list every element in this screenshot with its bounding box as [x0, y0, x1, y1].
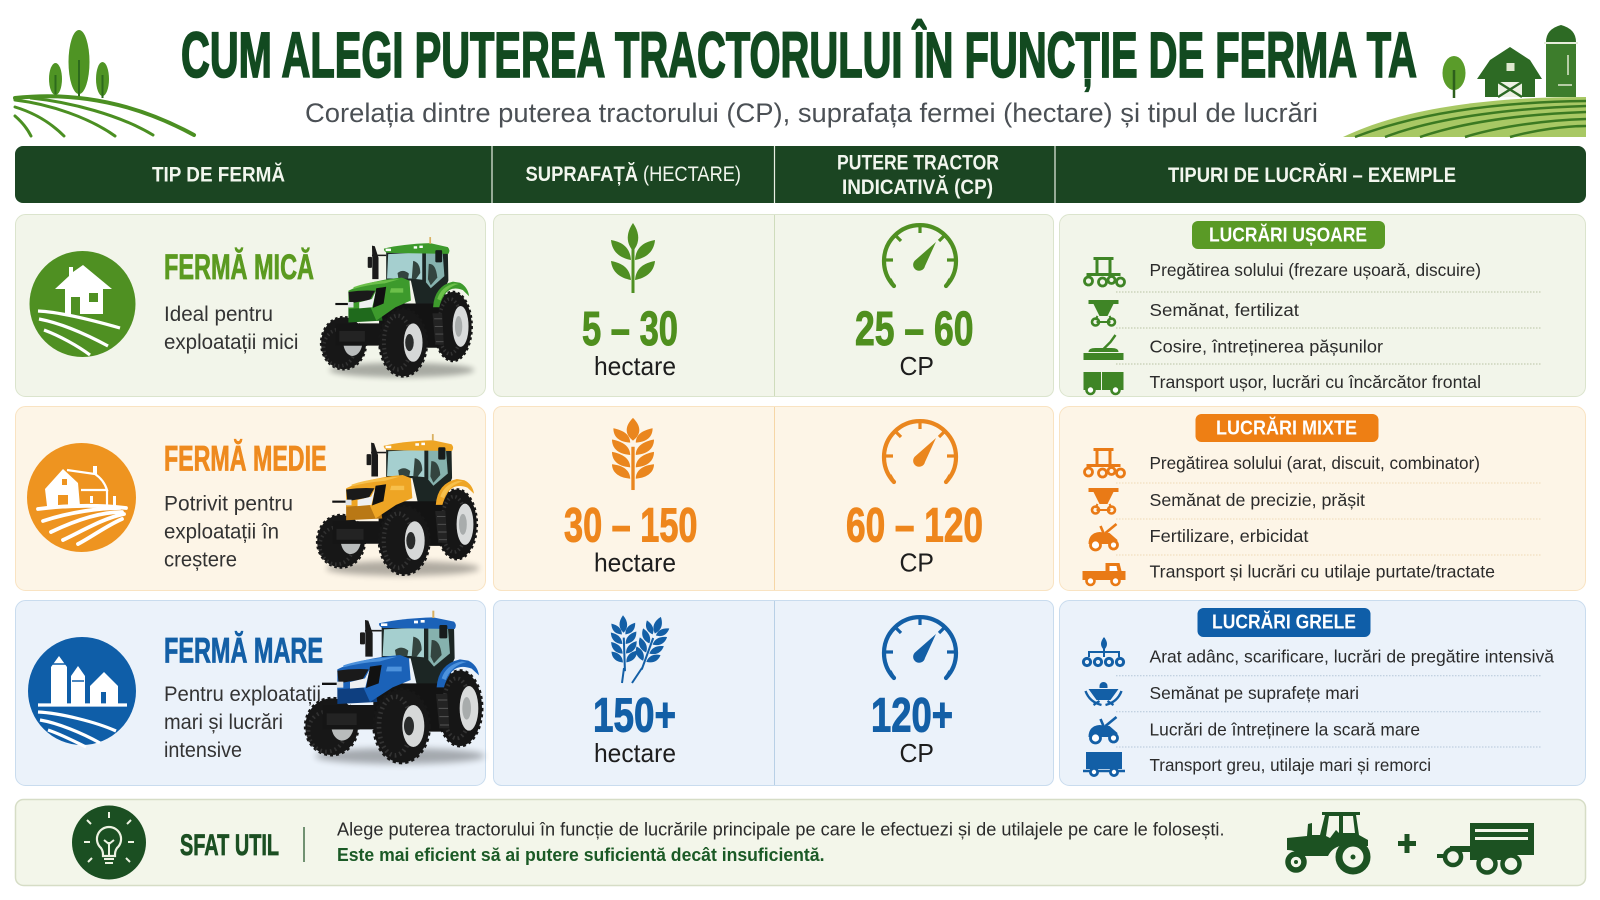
row 1 panel: area and power [494, 214, 1054, 396]
icon: seeder [1088, 300, 1118, 326]
badge: mixed work [1196, 414, 1378, 442]
tip label: SFAT UTIL [180, 829, 279, 862]
row 1 panel: light work [1060, 214, 1586, 396]
right landscape: farm with barn and silo [1343, 25, 1586, 137]
icon: sprayer [1088, 524, 1118, 550]
row 2 panel: medium farm [16, 406, 486, 590]
orange tractor [317, 434, 479, 576]
item: transport: Transport ușor, lucrări cu încărcător frontal [1150, 372, 1481, 392]
power unit: CP [900, 351, 934, 381]
item: sowing: Semănat, fertilizat [1150, 300, 1299, 320]
icon: tractor silhouette [1287, 812, 1368, 871]
description: mari și lucrări [164, 711, 283, 734]
icon: sprayer [1088, 717, 1118, 743]
green tractor [321, 237, 474, 377]
row 2 panel: mixed work [1060, 406, 1586, 590]
area value: 150+ [593, 690, 676, 743]
power unit: CP [900, 738, 934, 768]
farm name: FERMĂ MEDIE [164, 440, 326, 479]
badge: light work: LUCRĂRI UȘOARE [1209, 224, 1367, 247]
icon: gauge [884, 224, 956, 286]
icon: large farm silos [28, 637, 136, 747]
icon: small truck [1084, 372, 1124, 394]
header: area: (HECTARE) [643, 163, 741, 186]
header: tractor power: PUTERE TRACTOR [837, 152, 999, 174]
table header bar [15, 146, 1586, 203]
item: transport: Transport și lucrări cu utilaje purtate/tractate [1150, 562, 1495, 582]
icon: medium farm barn [27, 443, 136, 552]
plus sign [1398, 834, 1416, 853]
area unit: hectare [594, 351, 676, 381]
blue tractor [305, 611, 485, 764]
icon: leaf sprout [611, 223, 655, 293]
icon: tillage [1084, 257, 1124, 286]
item: soil preparation: Pregătirea solului (frezare ușoară, discuire) [1150, 260, 1481, 280]
row 3 panel: large farm [16, 600, 486, 786]
icon: small farm house [30, 251, 136, 357]
item: precision sowing: Semănat de precizie, prășit [1150, 490, 1365, 510]
icon: large seeder [1086, 682, 1122, 705]
description: Ideal pentru [164, 303, 273, 326]
icon: heavy plow [1083, 637, 1124, 666]
header: tractor power: INDICATIVĂ (CP) [842, 176, 993, 199]
row 3 panel: heavy work [1060, 600, 1586, 786]
item: soil preparation: Pregătirea solului (arat, discuit, combinator) [1150, 453, 1480, 473]
description: Pentru exploatații [164, 683, 321, 706]
row 1 panel: small farm [16, 214, 486, 396]
power value: 25 – 60 [855, 303, 974, 356]
description [164, 683, 321, 762]
item: fertilizing: Fertilizare, erbicidat [1150, 526, 1309, 546]
tip text: Alege puterea tractorului în funcție de lucrările principale pe care le efectuezi și de utilajele pe care le folosești. [337, 820, 1224, 840]
description: exploatații în [164, 520, 279, 544]
power unit: CP [900, 548, 934, 578]
area unit: hectare [594, 548, 676, 578]
header: area: SUPRAFAȚĂ [526, 163, 638, 186]
icon: gauge [884, 616, 956, 678]
icon: trailer [1083, 752, 1125, 776]
row 2 panel: area and power [494, 406, 1054, 590]
item: mowing: Cosire, întreținerea pășunilor [1150, 337, 1383, 357]
subtitle: Corelația dintre puterea tractorului (CP), suprafața fermei (hectare) și tipul de lucrări [305, 98, 1318, 128]
badge: mixed work: LUCRĂRI MIXTE [1216, 417, 1357, 440]
icon: precision seeder [1088, 488, 1118, 514]
header: work types: TIPURI DE LUCRĂRI – EXEMPLE [1168, 164, 1456, 187]
row 3 panel: area and power [494, 600, 1054, 786]
description: exploatații mici [164, 331, 298, 354]
farm name: FERMĂ MARE [164, 632, 323, 671]
footer tip panel [16, 800, 1586, 886]
item: deep ploughing: Arat adânc, scarificare, lucrări de pregătire intensivă [1150, 647, 1554, 667]
header: farm type: TIP DE FERMĂ [152, 164, 285, 186]
description: intensive [164, 739, 242, 762]
icon: tillage [1084, 448, 1124, 477]
item: heavy transport: Transport greu, utilaje mari și remorci [1150, 755, 1431, 775]
icon: light bulb [72, 806, 146, 880]
icon: pickup [1082, 563, 1126, 585]
icon: double wheat [610, 613, 673, 683]
area value: 5 – 30 [582, 303, 678, 356]
header: tractor power [837, 152, 999, 199]
left landscape decoration [15, 30, 194, 136]
icon: gauge [884, 420, 956, 482]
description: creștere [164, 548, 237, 572]
badge: heavy work: LUCRĂRI GRELE [1212, 611, 1356, 634]
power value: 120+ [871, 690, 953, 743]
header: area [526, 163, 741, 186]
description [164, 303, 298, 354]
icon: trailer silhouette [1437, 823, 1534, 872]
description: Potrivit pentru [164, 493, 293, 516]
area value: 30 – 150 [564, 500, 698, 553]
icon: mower [1084, 335, 1124, 360]
item: large sowing: Semănat pe suprafețe mari [1150, 683, 1359, 703]
power value: 60 – 120 [846, 500, 983, 553]
tip conclusion: Este mai eficient să ai putere suficientă decât insuficientă. [337, 845, 824, 865]
item: maintenance: Lucrări de întreținere la scară mare [1150, 720, 1420, 740]
farm name: FERMĂ MICĂ [164, 248, 314, 287]
badge: heavy work [1198, 608, 1370, 637]
description [164, 493, 293, 572]
area unit: hectare [594, 738, 676, 768]
icon: wheat ear [612, 418, 654, 490]
